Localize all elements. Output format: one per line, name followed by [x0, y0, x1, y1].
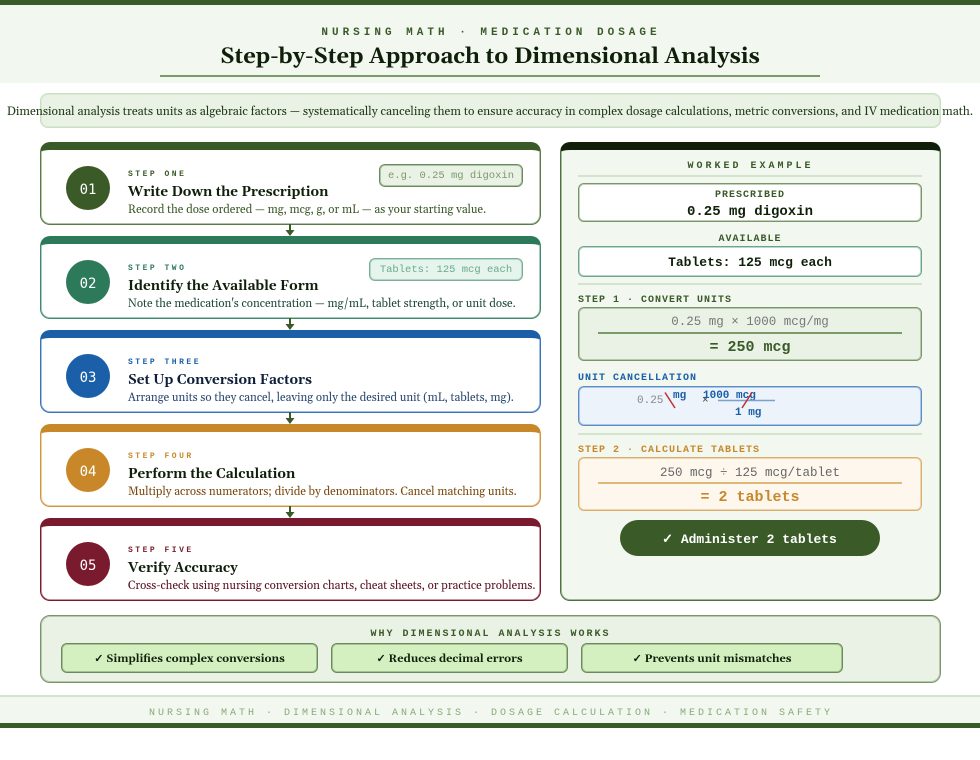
arrow 2	[286, 318, 294, 330]
step 1 convert label: STEP 1 · CONVERT UNITS	[578, 295, 732, 306]
step 1 title: Write Down the Prescription	[128, 183, 328, 201]
step 2 card	[40, 236, 541, 319]
available box: Tablets: 125 mcg each	[668, 255, 832, 270]
step 5 label: STEP FIVE	[128, 546, 194, 555]
step 4 description: Multiply across numerators; divide by denominators. Cancel matching units.	[128, 484, 517, 499]
step 2 title: Identify the Available Form	[128, 277, 318, 295]
cancellation equation: 0.25	[637, 395, 663, 407]
cancellation equation: 1 mg	[735, 407, 761, 419]
prescribed box	[578, 183, 922, 222]
benefit 2	[331, 643, 568, 673]
intro box	[40, 93, 941, 128]
tablets box	[578, 457, 922, 511]
unit cancellation box	[578, 386, 922, 426]
step 4 label: STEP FOUR	[128, 452, 194, 461]
worked example heading: WORKED EXAMPLE	[687, 161, 814, 172]
benefit 3: ✓ Prevents unit mismatches	[633, 652, 791, 666]
title underline	[160, 75, 820, 77]
step 2 label: STEP 2 · CALCULATE TABLETS	[578, 445, 760, 456]
why heading: WHY DIMENSIONAL ANALYSIS WORKS	[370, 629, 611, 640]
benefit 1: ✓ Simplifies complex conversions	[94, 652, 285, 666]
step 1 card	[40, 142, 541, 225]
panel: worked example	[560, 142, 941, 601]
step 2 description: Note the medication's concentration — mg/mL, tablet strength, or unit dose.	[128, 296, 516, 311]
kicker: NURSING MATH · MEDICATION DOSAGE	[321, 27, 661, 39]
step 1 tag: e.g. 0.25 mg digoxin	[388, 170, 514, 182]
arrow 4	[286, 506, 294, 518]
prescribed value: 0.25 mg digoxin	[687, 204, 813, 220]
step 2 number: 02	[80, 276, 96, 292]
step 5 title: Verify Accuracy	[128, 559, 238, 577]
step 3 number: 03	[80, 370, 96, 386]
intro text: Dimensional analysis treats units as algebraic factors — systematically canceling them to ensure accuracy in complex dosage calculations, metric conversions, and IV medication math.	[7, 105, 973, 120]
convert expression: 0.25 mg × 1000 mcg/mg	[671, 315, 829, 329]
unit cancellation label: UNIT CANCELLATION	[578, 373, 697, 384]
cancellation equation	[637, 390, 775, 419]
step 1 tag	[379, 164, 523, 187]
top bar	[0, 0, 980, 5]
step 3 description: Arrange units so they cancel, leaving only the desired unit (mL, tablets, mg).	[128, 390, 514, 405]
step 3 card	[40, 330, 541, 413]
benefit 3	[581, 643, 843, 673]
tablets rule	[598, 482, 902, 484]
panel: why dimensional analysis works	[40, 615, 941, 683]
step 5 number: 05	[80, 558, 96, 574]
step 5 card	[40, 518, 541, 601]
step 2 number	[66, 260, 110, 304]
cancellation equation: 1000 mcg	[703, 390, 756, 402]
step 2 tag	[369, 258, 523, 281]
convert result: = 250 mcg	[709, 339, 790, 356]
step 1 number: 01	[80, 182, 96, 198]
step 4 number	[66, 448, 110, 492]
step 2 label: STEP TWO	[128, 264, 186, 273]
step 3 label: STEP THREE	[128, 358, 201, 367]
tablets expression: 250 mcg ÷ 125 mcg/tablet	[660, 466, 840, 480]
arrow 1	[286, 224, 294, 236]
available label: AVAILABLE	[718, 234, 782, 245]
convert rule	[598, 332, 902, 334]
step 3 title: Set Up Conversion Factors	[128, 371, 312, 389]
step 5 description: Cross-check using nursing conversion charts, cheat sheets, or practice problems.	[128, 578, 535, 593]
step 1 description: Record the dose ordered — mg, mcg, g, or mL — as your starting value.	[128, 202, 486, 217]
step 5 number	[66, 542, 110, 586]
cancellation equation: ×	[702, 395, 709, 407]
step 4 card	[40, 424, 541, 507]
administer pill: ✓ Administer 2 tablets	[662, 532, 837, 547]
tablets result: = 2 tablets	[700, 489, 800, 506]
step 3 number	[66, 354, 110, 398]
cancellation equation: mg	[673, 390, 686, 402]
administer pill	[620, 520, 880, 556]
step 4 title: Perform the Calculation	[128, 465, 295, 483]
step 4 number: 04	[80, 464, 96, 480]
benefit 2: ✓ Reduces decimal errors	[376, 652, 523, 666]
footer text: NURSING MATH · DIMENSIONAL ANALYSIS · DOSAGE CALCULATION · MEDICATION SAFETY	[149, 708, 833, 719]
header	[0, 5, 980, 83]
title: Step-by-Step Approach to Dimensional Analysis	[220, 43, 760, 71]
benefit 1	[61, 643, 318, 673]
footer	[0, 695, 980, 728]
prescribed label: PRESCRIBED	[715, 190, 785, 201]
convert box	[578, 307, 922, 361]
arrow 3	[286, 412, 294, 424]
step 1 number	[66, 166, 110, 210]
step 2 tag: Tablets: 125 mcg each	[380, 264, 512, 276]
available box	[578, 246, 922, 277]
step 1 label: STEP ONE	[128, 170, 186, 179]
